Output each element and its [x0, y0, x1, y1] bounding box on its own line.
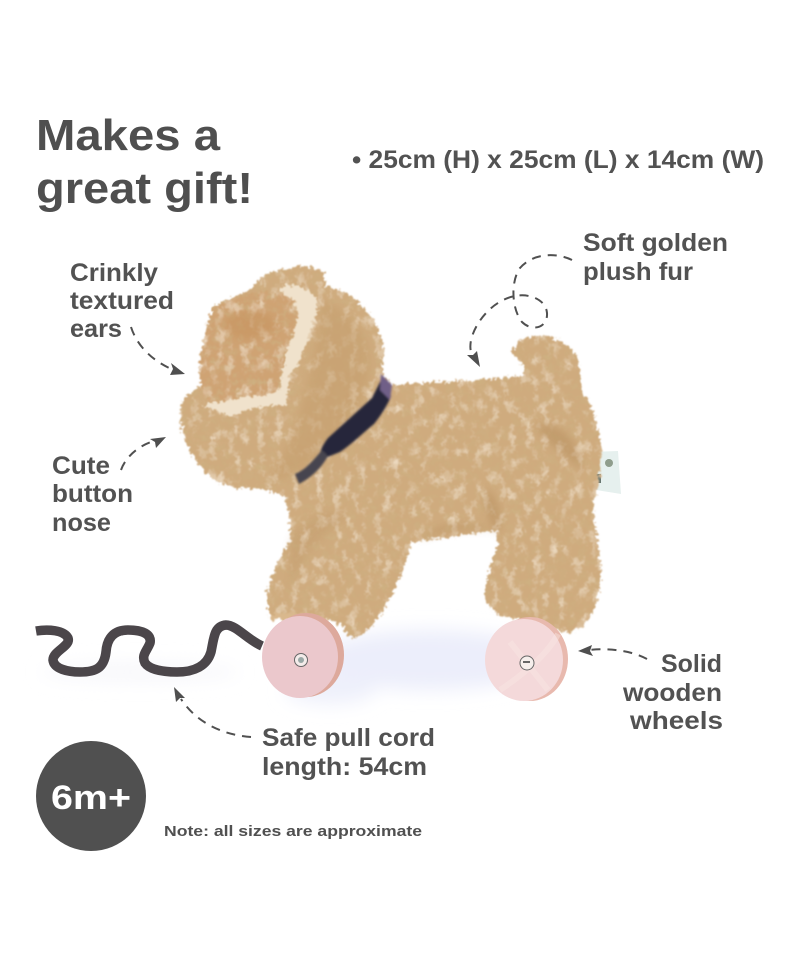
callout: cute button nose: Cute — [52, 452, 110, 480]
front wheel bolt — [294, 654, 308, 666]
title: great gift! — [36, 164, 253, 213]
dog head shading — [268, 300, 370, 482]
age badge: 6m+ — [51, 779, 131, 817]
front wheel — [262, 613, 344, 698]
dog tag label — [590, 451, 621, 494]
note: Note: all sizes are approximate — [164, 823, 422, 840]
dog body shading — [290, 424, 582, 590]
rear wheel bolt — [520, 656, 534, 670]
callout: soft golden plush fur: plush fur — [583, 258, 693, 286]
callout: crinkly textured ears — [70, 259, 185, 375]
callout: soft golden plush fur — [467, 229, 728, 367]
ear light trim — [203, 285, 318, 416]
callout: safe pull cord — [174, 687, 435, 781]
callout: cute button nose: nose — [52, 509, 111, 537]
title — [36, 111, 253, 213]
dimensions text: • 25cm (H) x 25cm (L) x 14cm (W) — [352, 146, 764, 174]
ear shading — [224, 310, 276, 340]
callout: cute button nose: button — [52, 480, 133, 508]
callout: solid wooden wheels: wooden — [622, 679, 722, 707]
floor shadow — [40, 630, 545, 704]
pull cord — [36, 625, 262, 672]
callout: soft golden plush fur: Soft golden — [583, 229, 728, 257]
plush dog — [180, 266, 621, 638]
dog body — [180, 266, 601, 638]
ear flap — [200, 292, 297, 402]
callout: crinkly textured ears: Crinkly — [70, 259, 158, 287]
callout: solid wooden wheels: wheels — [629, 707, 723, 735]
rear wheel — [485, 617, 568, 701]
callout: solid wooden wheels — [578, 645, 723, 735]
age badge — [36, 741, 146, 851]
dog collar — [295, 374, 392, 484]
dog rear far paw — [269, 550, 330, 620]
callout: safe pull cord: length: 54cm — [262, 753, 427, 781]
callout: crinkly textured ears: textured — [70, 287, 174, 315]
dog ear — [200, 285, 318, 416]
title: Makes a — [36, 111, 221, 160]
callout: crinkly textured ears: ears — [70, 315, 122, 343]
callout: solid wooden wheels: Solid — [661, 650, 722, 678]
callout: safe pull cord: Safe pull cord — [262, 724, 435, 752]
callout: cute button nose — [52, 437, 166, 537]
